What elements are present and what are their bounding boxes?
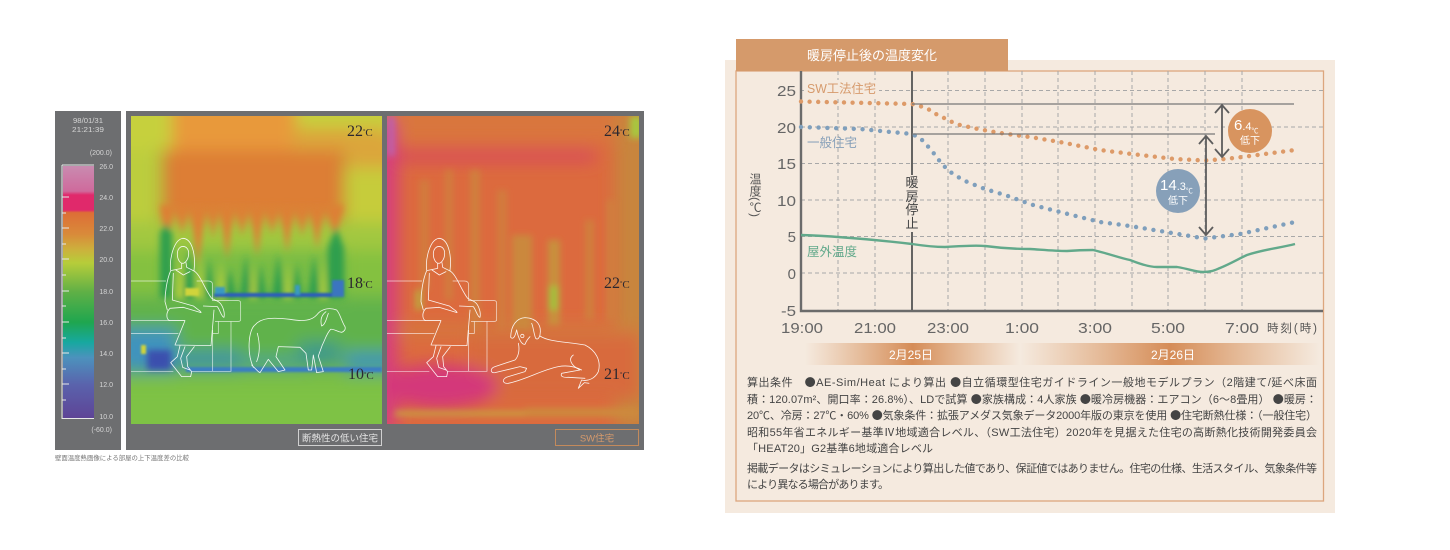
thermal image: low insulation house (131, 116, 382, 424)
x-axis unit: 時刻(時) (1267, 321, 1317, 335)
date band: Feb 25 (805, 343, 1020, 365)
scale labels: 22.0 (99, 226, 113, 233)
temperature labels: low insulation house: C (366, 370, 374, 382)
series: general house dotted line (801, 127, 1295, 238)
text block: calculation conditions: 算出条件 ●AE-Sim/Heat により算出 ●自立循環型住宅ガイドライン一般地モデルプラン（2階建て/延べ床面 (747, 374, 1317, 390)
series label: SW house: SW工法住宅 (807, 82, 876, 96)
heating stop label (905, 175, 919, 231)
text block: calculation conditions: 「HEAT20」G2基準6地域適合レベル (747, 441, 933, 455)
axes (801, 71, 1323, 311)
y-axis numbers: 20 (777, 120, 796, 137)
y-axis title: 温度(℃) (748, 173, 762, 217)
reference lines (912, 104, 1294, 134)
temperature labels: low insulation house: 10 (348, 366, 364, 383)
scale labels (90, 150, 113, 434)
x-axis time labels: 1:00 (1005, 320, 1039, 337)
colour scale bar (62, 165, 94, 418)
illustration: woman and sofa, SW house (387, 238, 497, 377)
text block: calculation conditions (747, 374, 1317, 455)
badge: 14.3 degrees drop: 14.3 (1160, 177, 1186, 194)
scale labels: 16.0 (99, 320, 113, 327)
scale labels: 20.0 (99, 257, 113, 264)
text block: calculation conditions: 昭和55年省エネルギー基準Ⅳ地域適合レベル、（SW工法住宅）2020年を見据えた住宅の高断熱化技術開発委員会 (747, 425, 1317, 439)
x-axis time labels: 23:00 (927, 320, 969, 337)
illustration: lying dog (491, 318, 599, 388)
scale timestamp: 98/01/31 (73, 118, 103, 125)
temperature labels: SW house: C (622, 370, 630, 382)
temperature labels: SW house: C (622, 279, 630, 291)
illustration: woman and sofa, low insulation house (131, 238, 241, 377)
x-axis time labels: 5:00 (1151, 320, 1185, 337)
x-axis time labels: 7:00 (1225, 320, 1259, 337)
series label: outdoor: 屋外温度 (807, 244, 857, 259)
label: low insulation house: 断熱性の低い住宅 (302, 432, 378, 444)
thermal image: SW house (387, 116, 639, 424)
temperature labels: low insulation house: 18 (347, 275, 363, 292)
illustration: standing dog (249, 309, 345, 373)
scale labels: (-60.0) (91, 427, 112, 434)
series label: general house: 一般住宅 (807, 136, 857, 150)
badge: 14.3 degrees drop: 低下 (1168, 195, 1188, 207)
text block: disclaimer (747, 461, 1317, 491)
panel: temperature change chart (725, 39, 1335, 513)
badge: 14.3 degrees drop: ℃ (1186, 187, 1193, 195)
temperature labels: low insulation house: ° (363, 280, 366, 287)
series: outdoor temperature line (801, 235, 1295, 272)
text block: disclaimer: 掲載データはシミュレーションにより算出した値であり、保証値ではありません。住宅の仕様、生活スタイル、気象条件等 (747, 461, 1317, 475)
heating stop label: 房 (905, 189, 919, 204)
y-axis numbers: 0 (788, 266, 796, 283)
x-axis time labels: 21:00 (854, 320, 896, 337)
temperature labels: SW house: ° (620, 371, 623, 378)
scale labels: 26.0 (99, 164, 113, 171)
heating stop label: 暖 (905, 175, 919, 190)
label: SW house: SW住宅 (580, 432, 614, 444)
temperature labels: SW house: ° (620, 280, 623, 287)
temperature labels: SW house: 24 (604, 123, 620, 140)
x-axis time labels (781, 320, 1259, 337)
scale labels: 18.0 (99, 289, 113, 296)
temperature labels: SW house: 21 (604, 366, 620, 383)
y-axis numbers: 15 (777, 156, 796, 173)
x-axis time labels: 3:00 (1078, 320, 1112, 337)
scale labels: 14.0 (99, 351, 113, 358)
temperature labels: low insulation house: C (365, 279, 373, 291)
y-axis numbers: 25 (777, 83, 796, 100)
date band: Feb 25: 2月25日 (889, 348, 933, 362)
date band: Feb 26: 2月26日 (1151, 348, 1195, 362)
scale labels: (200.0) (90, 150, 112, 157)
text block: calculation conditions: 20℃、冷房：27℃・60% ●気象条件：拡張アメダス気象データ2000年版の東京を使用 ●住宅断熱仕様：（一般住宅） (747, 407, 1317, 423)
heading tab: 暖房停止後の温度変化 (807, 48, 937, 63)
date band: Feb 26 (1020, 343, 1320, 365)
badge: 6.4 degrees drop (1228, 109, 1272, 153)
heading tab (736, 39, 1008, 71)
y-axis numbers: -5 (781, 303, 796, 320)
temperature labels: low insulation house: 22 (347, 123, 363, 140)
temperature labels: low insulation house: ° (364, 371, 367, 378)
scale timestamp (72, 118, 104, 134)
series: SW house dotted line (801, 102, 1295, 160)
label: SW house (556, 430, 638, 446)
temperature labels: SW house: C (622, 127, 630, 139)
caption: 壁面温度熱画像による部屋の上下温度差の比較 (55, 453, 190, 462)
text block: disclaimer: により異なる場合があります。 (747, 477, 889, 491)
heating stop line (911, 71, 913, 310)
label: low insulation house (298, 430, 382, 446)
temperature labels: SW house: 22 (604, 275, 620, 292)
temperature labels: low insulation house: ° (363, 128, 366, 135)
panel: thermal images frame (126, 111, 644, 450)
scale timestamp: 21:21:39 (72, 127, 104, 134)
x-axis time labels: 19:00 (781, 320, 823, 337)
panel: temperature colour scale (55, 111, 121, 450)
temperature labels: low insulation house (347, 123, 374, 383)
temperature labels: SW house (604, 123, 630, 383)
arrow: SW house drop (1215, 105, 1229, 157)
y-axis numbers: 5 (788, 229, 796, 246)
arrow: general house drop (1199, 136, 1213, 235)
temperature labels: SW house: ° (620, 128, 623, 135)
scale labels: 24.0 (99, 195, 113, 202)
badge: 14.3 degrees drop (1156, 169, 1200, 213)
y-axis numbers: 10 (777, 193, 796, 210)
scale labels: 12.0 (99, 382, 113, 389)
badge: 6.4 degrees drop: 低下 (1240, 135, 1260, 147)
heating stop label: 止 (905, 216, 919, 231)
badge: 6.4 degrees drop: 6.4 (1234, 117, 1252, 134)
line chart (748, 71, 1323, 337)
temperature labels: low insulation house: C (365, 127, 373, 139)
badge: 6.4 degrees drop: ℃ (1252, 127, 1259, 135)
heating stop label: 停 (905, 202, 919, 217)
text block: calculation conditions: 積：120.07m²、開口率：26.8%）、LDで試算 ●家族構成：4人家族 ●暖冷房機器：エアコン（6〜8畳用） ●暖房： (747, 391, 1317, 407)
scale labels: 10.0 (99, 414, 113, 421)
y-axis numbers (777, 83, 796, 320)
